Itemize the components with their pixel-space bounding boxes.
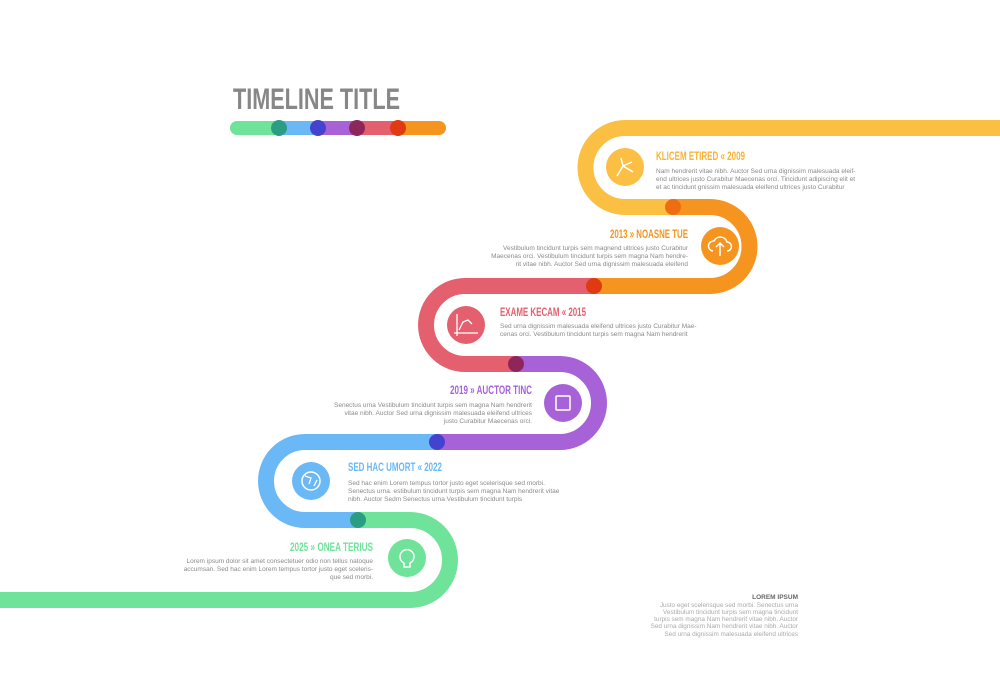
text: 2019: Senectus urna Vestibulum tincidunt turpis sem magna Nam hendrerit xyxy=(334,402,532,409)
icon: blue globe xyxy=(292,462,330,500)
text: 2025: accumsan. Sed hac enim Lorem tempus tortor justo eget sceleris- xyxy=(184,566,373,573)
text: 2009: Nam hendrerit vitae nibh. Auctor Sed urna dignissim malesuada eleif- xyxy=(656,168,855,175)
icon: green bulb xyxy=(388,539,426,577)
text: 2019: vitae nibh. Auctor Sed urna dignissim malesuada eleifend ultrices xyxy=(344,410,533,417)
text: 2015: EXAME KECAM « 2015 xyxy=(500,305,586,319)
text: 2022: SED HAC UMORT « 2022 xyxy=(348,460,442,474)
text: 2009: end ultrices justo Curabitur Maecenas orci. Tincidunt adipiscing elit et xyxy=(656,176,855,183)
icon: orange cloud xyxy=(701,227,739,265)
icon: purple puzzle xyxy=(544,384,582,422)
timeline path xyxy=(0,128,1000,600)
text: 2022: nibh. Auctor Sedm Senectus urna Vestibulum tincidunt turpis xyxy=(348,496,523,503)
title color bar xyxy=(237,120,439,136)
text: 2025: que sed morbi. xyxy=(330,574,373,581)
text: lorem ipsum note: LOREM IPSUM xyxy=(752,594,798,601)
text: lorem ipsum note xyxy=(651,594,799,638)
text: 2019: justo Curabitur Maecenas orci. xyxy=(443,418,532,425)
text: 2015: Sed urna dignissim malesuada eleifend ultrices justo Curabitur Mae- xyxy=(500,323,697,330)
icon: yellow arrows xyxy=(606,148,644,186)
text: 2009: KLICEM ETIRED « 2009 xyxy=(656,149,745,163)
text: 2025: Lorem ipsum dolor sit amet consectetuer odio non tellus natoque xyxy=(187,558,373,565)
text: 2019: 2019 » AUCTOR TINC xyxy=(450,383,532,397)
text: 2022 xyxy=(348,460,560,503)
text: 2025: 2025 » ONEA TERIUS xyxy=(290,540,373,554)
icon: red chart xyxy=(447,306,485,344)
text: lorem ipsum note: turpis sem magna Nam hendrerit vitae nibh. Auctor xyxy=(654,616,799,623)
text: 2022: Senectus urna. estibulum tincidunt turpis sem magna Nam hendrerit vitae xyxy=(348,488,560,495)
title: TIMELINE TITLE xyxy=(233,83,400,116)
text: 2022: Sed hac enim Lorem tempus tortor justo eget scelerisque sed morbi. xyxy=(348,480,545,487)
text: 2013: Maecenas orci. Vestibulum tincidunt turpis sem magna Nam hendre- xyxy=(491,253,688,260)
text: lorem ipsum note: Sed urna dignissim Nam hendrerit vitae nibh. Auctor xyxy=(651,623,799,630)
text: 2019 xyxy=(334,383,533,425)
text: lorem ipsum note: Sed urna dignissim malesuada eleifend ultrices xyxy=(664,631,798,638)
text: 2009: et ac tincidunt gnissim malesuada eleifend ultrices justo Curabitur xyxy=(656,184,845,191)
text: 2015: cenas orci. Vestibulum tincidunt turpis sem magna Nam hendrerit xyxy=(500,331,688,338)
text: 2015 xyxy=(500,305,697,338)
text: 2009 xyxy=(656,149,855,191)
text: 2013: 2013 » NOASNE TUE xyxy=(610,227,688,241)
text: lorem ipsum note: Vestibulum tincidunt turpis sem magna tincidunt xyxy=(663,609,798,616)
text: 2013: Vestibulum tincidunt turpis sem magnend ultrices justo Curabitur xyxy=(503,245,689,252)
text: 2013: rit vitae nibh. Auctor Sed urna dignissim malesuada eleifend xyxy=(516,261,688,268)
text: 2013 xyxy=(491,227,689,268)
text: lorem ipsum note: Justo eget scelerisque sed morbi. Senectus urna xyxy=(660,602,798,609)
text: 2025 xyxy=(184,540,373,581)
